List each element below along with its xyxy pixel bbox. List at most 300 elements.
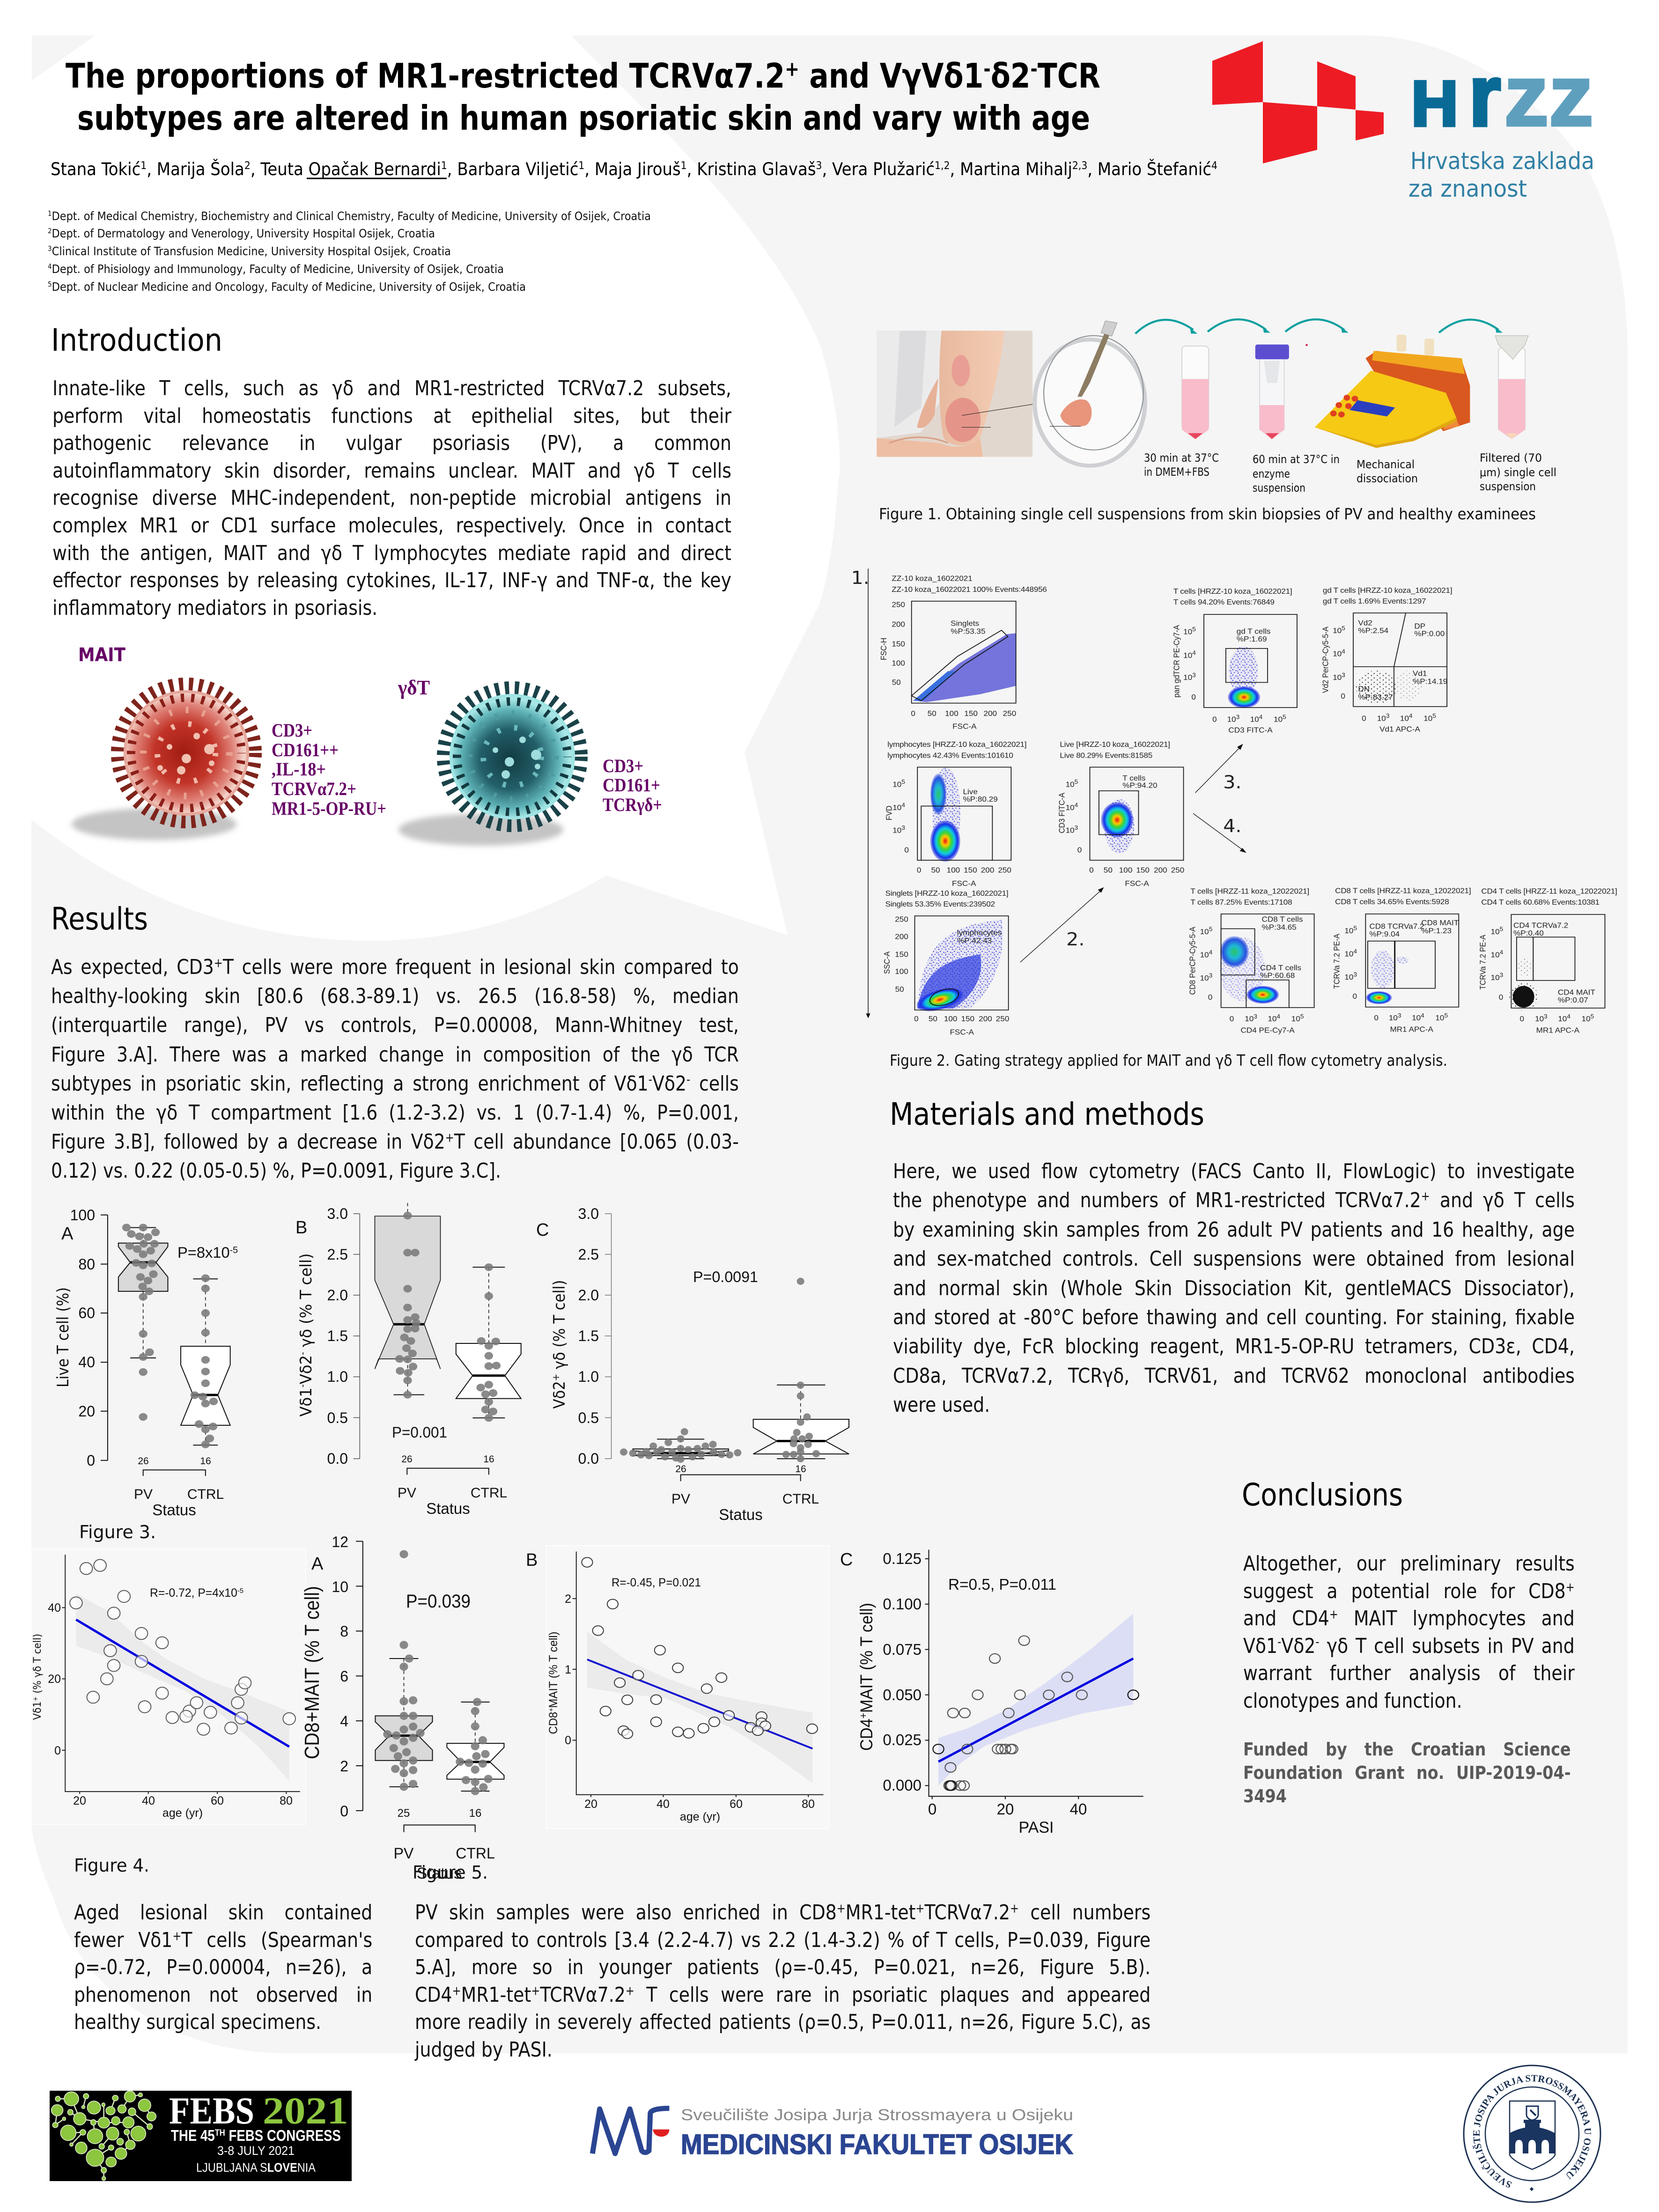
panel: gamma delta T cell: TCRγδ+ [603, 794, 662, 815]
plot: Vd1 Vd2 quadrants: 3 [1342, 671, 1345, 678]
plot: CD8 CD4 gates: %P:34.65 [1262, 923, 1297, 931]
plot: T cells gate: FSC-A [1125, 879, 1149, 888]
plot: CD4 MAIT gates: 4 [1567, 1013, 1571, 1020]
text block: conclusions: Vδ1-Vδ2- γδ T cell subsets in PV and [1243, 1634, 1575, 1658]
logo: Medicinski fakultet Osijek: MEDICINSKI FAKULTET OSIJEK [681, 2129, 1073, 2160]
scatter: figure 5B: 1 [565, 1663, 571, 1676]
plot: T cells gate: Live [HRZZ-10 koza_16022021] [1060, 741, 1170, 749]
plot: CD8 MAIT gates: CD8 T cells 34.65% Events:5928 [1335, 898, 1449, 906]
plot: CD8 MAIT gates: %P:1.23 [1421, 927, 1452, 935]
logo: university seal: SVEUČILIŠTE JOSIPA JURJA STROSSMAYERA U OSIJEKU [1471, 2072, 1593, 2190]
panel: MAIT cell: MAIT [78, 644, 126, 666]
plot: CD8 MAIT gates: 0 [1353, 992, 1357, 1001]
plot: Vd1 Vd2 quadrants: 10 [1423, 715, 1432, 723]
plot: singlets: FSC-H [879, 638, 888, 660]
plot: Vd1 Vd2 quadrants: 10 [1333, 650, 1342, 658]
scatter: figure 5B: 2 [565, 1593, 571, 1606]
plot: gd T cells: 10 [1250, 715, 1259, 723]
plot: T cells gate: %P:94.20 [1122, 782, 1158, 789]
heading: Results: Results [51, 901, 148, 937]
text block: results: Figure 3.B], followed by a decrease in Vδ2+T cell abundance [0.065 (0.03- [51, 1130, 739, 1154]
scatter: figure 4: 40 [48, 1601, 61, 1615]
text block: introduction: inflammatory mediators in psoriasis. [52, 596, 377, 620]
plot: live cells: 50 [931, 866, 940, 874]
logo: Medicinski fakultet Osijek [592, 2106, 1073, 2160]
plot: lymphocytes gate [883, 890, 1009, 1036]
step captions: μm) single cell [1480, 466, 1556, 479]
plot: gd T cells: T cells 94.20% Events:76849 [1173, 598, 1275, 606]
plot: singlets: 100 [945, 710, 959, 718]
boxplot: figure 3A: 26 [138, 1456, 149, 1467]
boxplot: figure 3C [536, 1205, 849, 1523]
plot: T cells gate: T cells [1122, 774, 1145, 782]
plot: live cells: 150 [964, 866, 977, 874]
panel: MAIT cell: ,IL-18+ [272, 759, 326, 780]
boxplot: figure 3B: CTRL [471, 1485, 507, 1501]
logo: FEBS 2021: 2021 [263, 2089, 348, 2132]
plot: CD4 MAIT gates: 0 [1519, 1015, 1524, 1023]
scatter: figure 5B: 80 [802, 1798, 815, 1811]
plot: CD8 CD4 gates: CD8 T cells [1262, 915, 1303, 924]
plot: CD8 MAIT gates: 0 [1374, 1014, 1379, 1022]
heading: Conclusions: Conclusions [1242, 1477, 1403, 1513]
boxplot: figure 3B: B [295, 1218, 307, 1238]
plot: lymphocytes gate: 50 [895, 986, 904, 994]
step captions: Filtered (70 [1480, 451, 1542, 465]
plot: gd T cells: 0 [1212, 715, 1217, 723]
step captions: enzyme [1253, 467, 1290, 480]
boxplot: figure 3A: Status [152, 1501, 196, 1519]
plot: gd T cells [1172, 588, 1297, 735]
plot: T cells gate: 200 [1154, 866, 1167, 874]
plot: live cells: 5 [901, 779, 905, 785]
plot: live cells: FSC-A [952, 879, 976, 888]
scatter: figure 5B: 60 [730, 1798, 743, 1811]
plot: Vd1 Vd2 quadrants: 10 [1400, 715, 1409, 723]
plot: CD4 MAIT gates: CD4 TCRVa7.2 [1513, 922, 1568, 929]
scatter: figure 4 [31, 1549, 306, 1824]
boxplot: figure 3B: 0.5 [327, 1409, 348, 1426]
plot: gd T cells: gd T cells [1237, 627, 1271, 635]
plot: CD4 MAIT gates: CD4 MAIT [1558, 988, 1595, 996]
plot: gd T cells: 3 [1192, 671, 1196, 678]
text block: conclusions: suggest a potential role for CD8+ [1243, 1579, 1575, 1603]
plot: CD4 MAIT gates: 5 [1500, 926, 1503, 933]
text block: conclusions: and CD4+ MAIT lymphocytes and [1243, 1607, 1575, 1630]
plot: T cells gate: 150 [1136, 866, 1150, 874]
step captions: 60 min at 37°C in [1253, 453, 1340, 466]
text block: results: subtypes in psoriatic skin, reflecting a strong enrichment of Vδ1-Vδ2- cells [51, 1072, 739, 1096]
boxplot: figure 3B: 0.0 [327, 1450, 348, 1467]
plot: lymphocytes gate: lymphocytes [957, 929, 1002, 937]
plot: T cells gate: 50 [1104, 866, 1113, 874]
boxplot: figure 3A: Live T cell (%) [54, 1287, 73, 1387]
plot: CD8 CD4 gates: 3 [1253, 1013, 1257, 1020]
plot: CD8 CD4 gates: 3 [1209, 972, 1212, 979]
scatter: figure 5C: C [840, 1550, 853, 1570]
plot: CD8 MAIT gates: CD8 TCRVa7.2 [1369, 922, 1424, 930]
plot: Vd1 Vd2 quadrants: 3 [1386, 713, 1389, 719]
plot: singlets: ZZ-10 koza_16022021 100% Events:448956 [892, 585, 1047, 594]
plot: CD8 MAIT gates: 10 [1412, 1014, 1421, 1022]
plot: CD8 CD4 gates: 4 [1277, 1013, 1280, 1020]
text block: results: within the γδ T compartment [1.6 (1.2-3.2) vs. 1 (0.7-1.4) %, P=0.001, [51, 1101, 739, 1125]
arrow: main gating axis [851, 568, 870, 1018]
arrows: gating steps: 2. [1066, 929, 1084, 950]
step captions: 30 min at 37°C [1144, 451, 1219, 465]
boxplot: figure 5A: CD8+MAIT (% T cell) [301, 1586, 324, 1759]
boxplot: figure 3A: 40 [78, 1354, 95, 1371]
plot: CD8 MAIT gates: 3 [1353, 971, 1357, 978]
figure 2 caption: Figure 2. Gating strategy applied for MAIT and γδ T cell flow cytometry analysis. [890, 1051, 1447, 1069]
boxplot: figure 3B: Vδ1-Vδ2- γδ (% T cell) [297, 1253, 316, 1417]
boxplot: figure 3A: A [61, 1224, 74, 1244]
text block: introduction: pathogenic relevance in vulgar psoriasis (PV), a common [52, 431, 731, 455]
boxplot: figure 3C: 0.5 [578, 1409, 599, 1426]
plot: CD8 CD4 gates: %P:60.68 [1260, 972, 1295, 980]
text block: conclusions: warrant further analysis of their [1243, 1661, 1575, 1685]
text block: figure 4 description: phenomenon not observed in [74, 1983, 372, 2007]
boxplot: figure 3A: PV [134, 1487, 153, 1502]
plot: CD8 MAIT gates: CD8 T cells [HRZZ-11 koza_12022021] [1335, 887, 1471, 895]
icon: tube 2 [1255, 344, 1308, 439]
plot: CD4 MAIT gates: CD4 T cells [HRZZ-11 koza_12022021] [1481, 887, 1617, 896]
boxplot: figure 5A: Status [417, 1865, 462, 1882]
plot: lymphocytes gate: 150 [961, 1015, 974, 1023]
boxplot: figure 5A: P=0.039 [406, 1591, 471, 1612]
plot: live cells: 3 [901, 824, 905, 831]
text block: figure 5 description: more readily in severely affected patients (ρ=0.5, P=0.011, n=26, Figure 5.C), as [415, 2010, 1150, 2034]
plot: Vd1 Vd2 quadrants: 10 [1377, 715, 1386, 723]
plot: lymphocytes gate: Singlets 53.35% Events:239502 [885, 900, 995, 908]
boxplot: figure 5A: A [311, 1554, 324, 1574]
plot: T cells gate: 4 [1075, 802, 1078, 808]
plot: CD8 MAIT gates: 10 [1344, 973, 1353, 981]
text block: materials and methods: CD8a, TCRVα7.2, TCRγδ, TCRVδ1, and TCRVδ2 monoclonal antibodies [893, 1364, 1575, 1388]
plot: CD8 CD4 gates: CD4 T cells [1260, 964, 1301, 972]
panel: MAIT cell: CD161++ [272, 739, 339, 760]
boxplot: figure 3A: 60 [78, 1305, 95, 1321]
plot: CD8 CD4 gates: 5 [1209, 926, 1212, 933]
plot: CD8 CD4 gates: 10 [1200, 928, 1209, 936]
scatter: figure 5B: 0 [565, 1734, 571, 1747]
plot: CD8 MAIT gates: CD8 MAIT [1421, 919, 1459, 927]
boxplot: figure 5A: 25 [398, 1807, 410, 1820]
logo: FEBS 2021: FEBS [169, 2089, 254, 2132]
plot: gd T cells: %P:1.69 [1237, 635, 1267, 643]
boxplot: figure 3C: Vδ2+ γδ (% T cell) [550, 1280, 569, 1408]
plot: Vd1 Vd2 quadrants: 5 [1432, 713, 1436, 719]
text block: materials and methods: by examining skin samples from 26 adult PV patients and 16 healthy, age [893, 1218, 1575, 1242]
plot: live cells: 0 [904, 846, 909, 854]
text block: materials and methods: viability dye, FcR blocking reagent, MR1-5-OP-RU tetramers, CD3ε, CD4, [893, 1335, 1575, 1358]
plot: lymphocytes gate: 100 [944, 1015, 957, 1023]
figure 3 label: Figure 3. [79, 1522, 156, 1542]
affiliations: 4Dept. of Phisiology and Immunology, Faculty of Medicine, University of Osijek, Croatia [48, 262, 504, 276]
plot: CD4 MAIT gates: %P:0.07 [1558, 996, 1588, 1004]
plot: lymphocytes gate: 200 [895, 933, 908, 941]
boxplot: figure 3A [54, 1207, 238, 1519]
logo: HRZZ: za znanost [1408, 175, 1527, 202]
scatter: figure 4: 60 [211, 1794, 224, 1807]
plot: T cells gate: 3 [1075, 824, 1078, 831]
plot: Vd1 Vd2 quadrants: 0 [1341, 693, 1345, 700]
plot: lymphocytes gate: Singlets [HRZZ-10 koza_16022021] [885, 890, 1009, 898]
text block: figure 4 description: ρ=-0.72, P=0.00004, n=26), a [74, 1955, 372, 1979]
plot: CD8 MAIT gates: MR1 APC-A [1390, 1025, 1433, 1033]
plot: CD8 CD4 gates: T cells [HRZZ-11 koza_12022021] [1190, 887, 1309, 896]
panel: gamma delta T cell: CD3+ [603, 755, 643, 776]
plot: gd T cells: CD3 FITC-A [1228, 726, 1273, 735]
plot: T cells gate [1058, 741, 1184, 888]
plot: live cells: 250 [998, 866, 1011, 874]
plot: Vd1 Vd2 quadrants: Vd1 APC-A [1379, 725, 1420, 733]
plot: singlets: 100 [892, 659, 905, 667]
plot: CD4 MAIT gates: 4 [1500, 949, 1503, 956]
panel: gamma delta T cell: γδT [398, 676, 430, 699]
boxplot: figure 3A: 100 [70, 1207, 95, 1224]
step captions: suspension [1253, 481, 1305, 494]
boxplot: figure 5A: 0 [340, 1803, 348, 1820]
boxplot: figure 5A: 2 [340, 1758, 348, 1775]
plot: T cells gate: 10 [1066, 826, 1075, 834]
text block: funding [1243, 1738, 1571, 1808]
plot: live cells: FVD [885, 805, 894, 820]
plot: CD8 MAIT gates: %P:9.04 [1369, 930, 1400, 938]
plot: CD8 CD4 gates: 10 [1268, 1015, 1277, 1023]
text block: conclusions: Altogether, our preliminary results [1243, 1552, 1575, 1576]
plot: CD8 CD4 gates: CD8 PerCP-Cy5-5-A [1188, 927, 1197, 995]
plot: CD4 MAIT gates: 10 [1558, 1015, 1567, 1023]
figure 1 caption: Figure 1. Obtaining single cell suspensions from skin biopsies of PV and healthy examinees [879, 505, 1536, 523]
plot: CD8 MAIT gates: 10 [1389, 1014, 1398, 1022]
text block: introduction: with the antigen, MAIT and γδ T lymphocytes mediate rapid and direct [52, 541, 731, 565]
panel: MAIT cell: MR1-5-OP-RU+ [272, 798, 386, 819]
panel: gamma delta T cell: CD161+ [603, 774, 660, 796]
figure 2: flow cytometry gating [851, 568, 1617, 1036]
text block: introduction: effector responses by releasing cytokines, IL-17, INF-γ and TNF-α, the key [52, 568, 731, 592]
boxplot: figure 3C: 3.0 [578, 1205, 599, 1222]
text block: figure 5 description: compared to controls [3.4 (2.2-4.7) vs 2.2 (1.4-3.2) % of T cells, P=0.039, Figure [415, 1928, 1150, 1952]
boxplot: figure 5A: PV [394, 1845, 414, 1862]
plot: singlets: 50 [928, 710, 936, 718]
boxplot: figure 3C: 1.0 [578, 1368, 599, 1385]
plot: CD4 MAIT gates [1479, 887, 1617, 1034]
logo: FEBS 2021 [50, 2089, 352, 2181]
plot: Vd1 Vd2 quadrants: 4 [1342, 648, 1345, 655]
text block: figure 4 description: Aged lesional skin contained [74, 1901, 372, 1924]
scatter: figure 5C: PASI [1019, 1819, 1054, 1836]
photo: psoriatic arm [877, 331, 1074, 457]
plot: T cells gate: 5 [1075, 779, 1078, 785]
text block: results: healthy-looking skin [80.6 (68.3-89.1) vs. 26.5 (16.8-58) %, median [51, 984, 739, 1008]
boxplot: figure 3B: 1.0 [327, 1368, 348, 1385]
scatter: figure 5C: CD4+MAIT (% T cell) [857, 1603, 876, 1751]
text block: introduction: complex MR1 or CD1 surface molecules, respectively. Once in contact [52, 514, 731, 538]
logo: HRZZ [1212, 41, 1594, 202]
boxplot: figure 3B [295, 1203, 521, 1517]
step captions: Mechanical [1357, 458, 1415, 471]
scatter: figure 5B: 20 [584, 1798, 597, 1811]
plot: CD8 CD4 gates: 10 [1200, 951, 1209, 959]
text block: figure 5 description [415, 1899, 1150, 2064]
logo: HRZZ: Hrvatska zaklada [1410, 147, 1594, 175]
boxplot: figure 5A: 16 [469, 1807, 481, 1820]
plot: T cells gate: 10 [1066, 781, 1075, 789]
plot: CD8 CD4 gates: 10 [1291, 1015, 1300, 1023]
plot: CD4 MAIT gates: 10 [1535, 1015, 1544, 1023]
plot: T cells gate: 0 [1089, 866, 1094, 874]
scatter: figure 5C: 0.125 [883, 1550, 922, 1567]
plot: gd T cells: 10 [1227, 715, 1236, 723]
boxplot: figure 3B: 26 [401, 1454, 413, 1465]
plot: gd T cells: 10 [1183, 651, 1192, 660]
plot: singlets: 150 [892, 640, 905, 648]
scatter: figure 5C: 40 [1070, 1800, 1087, 1818]
scatter: figure 5B: R=-0.45, P=0.021 [612, 1576, 701, 1589]
scatter: figure 4: Vδ1+ (% γδ T cell) [32, 1634, 44, 1720]
boxplot: figure 5A: 12 [332, 1534, 348, 1550]
plot: CD8 CD4 gates: CD4 PE-Cy7-A [1240, 1026, 1295, 1034]
plot: CD8 CD4 gates: T cells 87.25% Events:17108 [1190, 898, 1292, 907]
plot: gd T cells: 4 [1259, 714, 1262, 720]
plot: CD4 MAIT gates: 3 [1500, 972, 1503, 978]
plot: CD8 MAIT gates: 10 [1344, 927, 1353, 935]
plot: CD8 MAIT gates: 4 [1421, 1012, 1424, 1019]
scatter: figure 5C: 0.000 [883, 1777, 922, 1794]
plot: CD8 MAIT gates: 5 [1444, 1012, 1448, 1019]
text block: results: 0.12) vs. 0.22 (0.05-0.5) %, P=0.0091, Figure 3.C]. [51, 1159, 501, 1183]
text block: materials and methods: and stored at -80°C before thawing and cell counting. For staining, fixable [893, 1305, 1575, 1329]
plot: Vd1 Vd2 quadrants: 0 [1362, 715, 1366, 723]
boxplot: figure 3A: CTRL [187, 1487, 224, 1502]
affiliations: 1Dept. of Medical Chemistry, Biochemistry and Clinical Chemistry, Faculty of Medicine, University of Osijek, Croatia [48, 209, 651, 223]
plot: CD8 MAIT gates: TCRVa 7.2 PE-A [1333, 934, 1342, 989]
plot: Vd1 Vd2 quadrants: %P:2.54 [1358, 627, 1388, 635]
affiliations: 3Clinical Institute of Transfusion Medicine, University Hospital Osijek, Croatia [48, 244, 451, 258]
scatter: figure 5C: R=0.5, P=0.011 [948, 1576, 1056, 1593]
text block: materials and methods: the phenotype and numbers of MR1-restricted TCRVα7.2+ and γδ T cells [893, 1188, 1575, 1212]
plot: singlets: FSC-A [952, 723, 977, 730]
plot: Vd1 Vd2 quadrants: 5 [1342, 625, 1345, 632]
plot: CD8 CD4 gates: 0 [1208, 993, 1212, 1002]
plot: CD4 MAIT gates: 10 [1491, 951, 1500, 959]
scatter: figure 5B [526, 1546, 829, 1829]
arrows: gating steps: 4. [1223, 816, 1241, 837]
plot: lymphocytes gate: FSC-A [950, 1028, 974, 1036]
plot: lymphocytes gate: 200 [979, 1015, 992, 1023]
text block: figure 4 description: healthy surgical specimens. [74, 2010, 321, 2034]
plot: singlets: ZZ-10 koza_16022021 [892, 575, 973, 583]
text block: introduction: autoinflammatory skin disorder, remains unclear. MAIT and γδ T cells [52, 459, 731, 483]
logo: HRZZ: H [1411, 68, 1458, 139]
plot: CD8 MAIT gates: 10 [1344, 950, 1353, 958]
scatter: figure 4: 40 [142, 1794, 155, 1807]
plot: lymphocytes gate: %P:42.43 [957, 937, 992, 945]
plot: Vd1 Vd2 quadrants: %P:83.27 [1358, 693, 1393, 701]
text block: introduction: recognise diverse MHC-independent, non-peptide microbial antigens in [52, 486, 731, 510]
scatter: figure 4: 80 [280, 1794, 293, 1807]
plot: live cells: %P:80.29 [963, 796, 998, 804]
plot: Vd1 Vd2 quadrants: 4 [1409, 713, 1413, 719]
boxplot: figure 3B: P=0.001 [392, 1424, 447, 1441]
panel: MAIT cell: CD3+ [272, 720, 312, 741]
plot: Vd1 Vd2 quadrants: Vd2 [1358, 619, 1372, 627]
plot: live cells: 0 [917, 866, 921, 874]
plot: singlets: 50 [892, 678, 901, 687]
plot: live cells: 10 [892, 826, 901, 834]
plot: T cells gate: Live 80.29% Events:81585 [1060, 752, 1152, 759]
plot: lymphocytes gate: 150 [895, 951, 908, 959]
boxplot: figure 3C: 2.0 [578, 1287, 599, 1304]
text block: funding: Foundation Grant no. UIP-2019-04- [1243, 1762, 1571, 1783]
plot: gd T cells: 4 [1192, 649, 1196, 656]
plot: gd T cells: T cells [HRZZ-10 koza_16022021] [1173, 588, 1292, 596]
affiliations [48, 209, 651, 294]
logo: HRZZ: r [1469, 48, 1501, 144]
scatter: figure 4: 20 [73, 1794, 86, 1807]
step captions [1144, 451, 1556, 494]
boxplot: figure 5A: 8 [340, 1623, 348, 1640]
scatter: figure 5B: age (yr) [680, 1810, 720, 1823]
boxplot: figure 3B: 2.5 [327, 1246, 348, 1263]
boxplot: figure 3A: 80 [78, 1256, 95, 1273]
plot: live cells: 4 [901, 802, 905, 808]
plot: singlets: %P:53.35 [951, 627, 985, 635]
arrow: main gating axis: 1. [851, 568, 870, 589]
logo: FEBS 2021: LJUBLJANA SLOVENIA [196, 2160, 316, 2175]
scatter: figure 4: R=-0.72, P=4x10-5 [150, 1586, 243, 1600]
plot: gd T cells: 0 [1191, 693, 1196, 701]
plot: CD4 MAIT gates: MR1 APC-A [1536, 1026, 1579, 1034]
plot: Vd1 Vd2 quadrants: Vd1 [1413, 670, 1427, 678]
text block: introduction: Innate-like T cells, such as γδ and MR1-restricted TCRVα7.2 subsets, [52, 376, 731, 400]
logo: Medicinski fakultet Osijek: Sveučilište Josipa Jurja Strossmayera u Osijeku [681, 2106, 1073, 2124]
plot: gd T cells: 3 [1236, 714, 1239, 720]
boxplot: figure 3A: 20 [78, 1403, 95, 1420]
text block: introduction [52, 375, 731, 622]
plot: CD8 CD4 gates: 0 [1230, 1015, 1234, 1023]
plot: CD8 MAIT gates [1333, 887, 1471, 1033]
plot: CD8 CD4 gates: 10 [1200, 974, 1209, 982]
scatter: figure 4: 0 [54, 1744, 61, 1757]
title [66, 56, 1100, 138]
scatter: figure 5C [840, 1549, 1143, 1836]
plot: live cells: lymphocytes [HRZZ-10 koza_16022021] [887, 741, 1027, 749]
boxplot: figure 3B: PV [398, 1485, 416, 1501]
boxplot: figure 5A [301, 1534, 504, 1882]
plot: Vd1 Vd2 quadrants: DN [1358, 685, 1370, 693]
text block: figure 5 description: PV skin samples were also enriched in CD8+MR1-tet+TCRVα7.2+ cell numbers [415, 1901, 1150, 1924]
plot: lymphocytes gate: 250 [996, 1015, 1009, 1023]
plot: Vd1 Vd2 quadrants: 10 [1333, 674, 1342, 682]
icon: tube 1 [1182, 346, 1209, 439]
plot: live cells: 10 [892, 804, 901, 812]
boxplot: figure 3B: 1.5 [327, 1327, 348, 1344]
plot: CD8 MAIT gates: 4 [1353, 948, 1357, 955]
plot: CD8 MAIT gates: 10 [1435, 1014, 1444, 1022]
text block: figure 5 description: CD4+MR1-tet+TCRVα7.2+ T cells were rare in psoriatic plaques and appeared [415, 1983, 1150, 2007]
plot: Vd1 Vd2 quadrants: gd T cells [HRZZ-10 koza_16022021] [1323, 587, 1453, 595]
plot: singlets: 250 [1003, 710, 1016, 718]
scatter: figure 5C: 0.075 [883, 1641, 922, 1658]
plot: live cells: 10 [892, 781, 901, 789]
plot: lymphocytes gate: 100 [895, 968, 908, 976]
plot: Vd1 Vd2 quadrants: 10 [1333, 627, 1342, 635]
plot: singlets: 200 [892, 620, 905, 628]
boxplot: figure 5A: 10 [332, 1578, 348, 1595]
arrows: process steps [1135, 319, 1503, 334]
